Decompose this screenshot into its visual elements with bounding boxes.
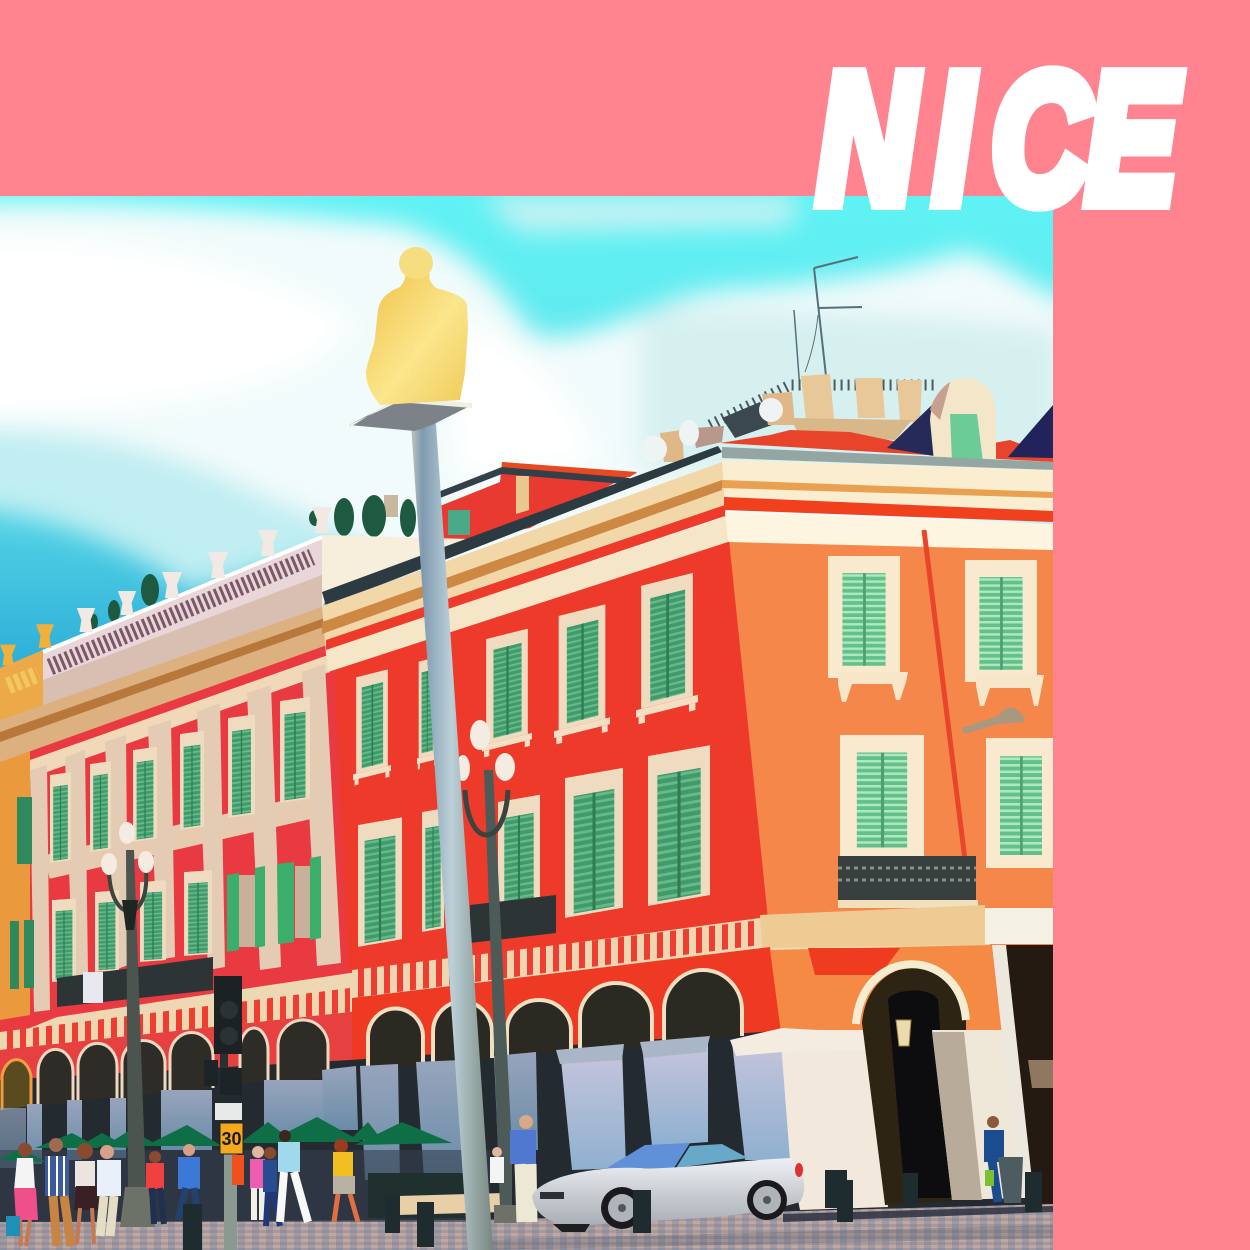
windows: orange facade (828, 556, 1056, 868)
frieze band (0, 905, 990, 1050)
windows: red facade upper (353, 572, 698, 786)
left building: upper cornice (0, 606, 330, 762)
photo: Place Massena, Nice (0, 196, 1100, 1250)
lamp post: centre (456, 720, 517, 1223)
sky (0, 196, 1053, 1250)
right pier (932, 1030, 1022, 1200)
lower wall left (0, 1012, 352, 1120)
arched doorway (856, 964, 966, 1205)
left building: spandrel panels (47, 805, 318, 867)
main building: orange facade (724, 515, 1053, 1042)
arches: left facade (2, 1020, 328, 1110)
balcony: orange facade (838, 856, 978, 908)
statue platform (349, 397, 472, 431)
pilaster and shopfront (985, 908, 1053, 1205)
pedestrians (6, 1115, 1004, 1246)
main building: red facade (325, 530, 780, 1085)
shadow on orange wall (808, 948, 900, 975)
windows: red facade lower (358, 745, 710, 947)
arcade base dark (0, 1030, 1053, 1224)
arcade pillars: left (0, 1080, 325, 1168)
rooftop: lower terrace wall (42, 535, 322, 712)
wall lamp (962, 708, 1025, 734)
main building: cornice red facade (322, 462, 726, 655)
cafe terrace (0, 1150, 504, 1222)
lamp post: left (101, 822, 155, 1227)
left building: orange end (0, 720, 30, 1020)
rooftop: trees (90, 495, 416, 630)
rooftop: chimneys and railing (641, 374, 935, 462)
main building: cornice orange facade (722, 460, 1053, 517)
rooftop: orange end wall (0, 650, 43, 735)
traffic light and sign: 30 (221, 1129, 242, 1149)
lower wall red facade (352, 947, 782, 1095)
bollards and bins (183, 1157, 1042, 1250)
rooftop: dormer window (887, 378, 1053, 462)
lower wall orange facade (770, 945, 1000, 1040)
rooftop: balustrade (0, 507, 332, 686)
clouds (0, 196, 1100, 620)
windows: left facade upper (17, 697, 310, 864)
silver convertible car (532, 1143, 804, 1232)
corner pier (730, 1028, 888, 1210)
left building: columns (30, 664, 341, 1012)
seated yellow statue (366, 247, 468, 405)
balconies (57, 895, 556, 1007)
traffic light and sign (204, 976, 243, 1250)
rooftop: red tile roof (720, 430, 1053, 462)
downpipe (924, 530, 965, 860)
antenna (794, 257, 862, 390)
arcade pillars: right (322, 1036, 710, 1180)
left building: red facade (0, 625, 355, 1110)
pink panel: top band (0, 0, 1250, 196)
pink panel: right column (1053, 196, 1250, 1250)
rooftop: terrace wall (322, 535, 470, 608)
rooftop: rear building (384, 462, 637, 545)
cafe parasols (0, 1117, 452, 1162)
main building: roof edge (322, 446, 722, 606)
statue pole (410, 410, 493, 1250)
arches: red facade (368, 970, 742, 1068)
windows: left facade lower (10, 856, 321, 989)
kerb shadow (783, 1206, 1053, 1222)
paving (0, 1204, 1053, 1250)
title: NICE (818, 37, 1181, 241)
